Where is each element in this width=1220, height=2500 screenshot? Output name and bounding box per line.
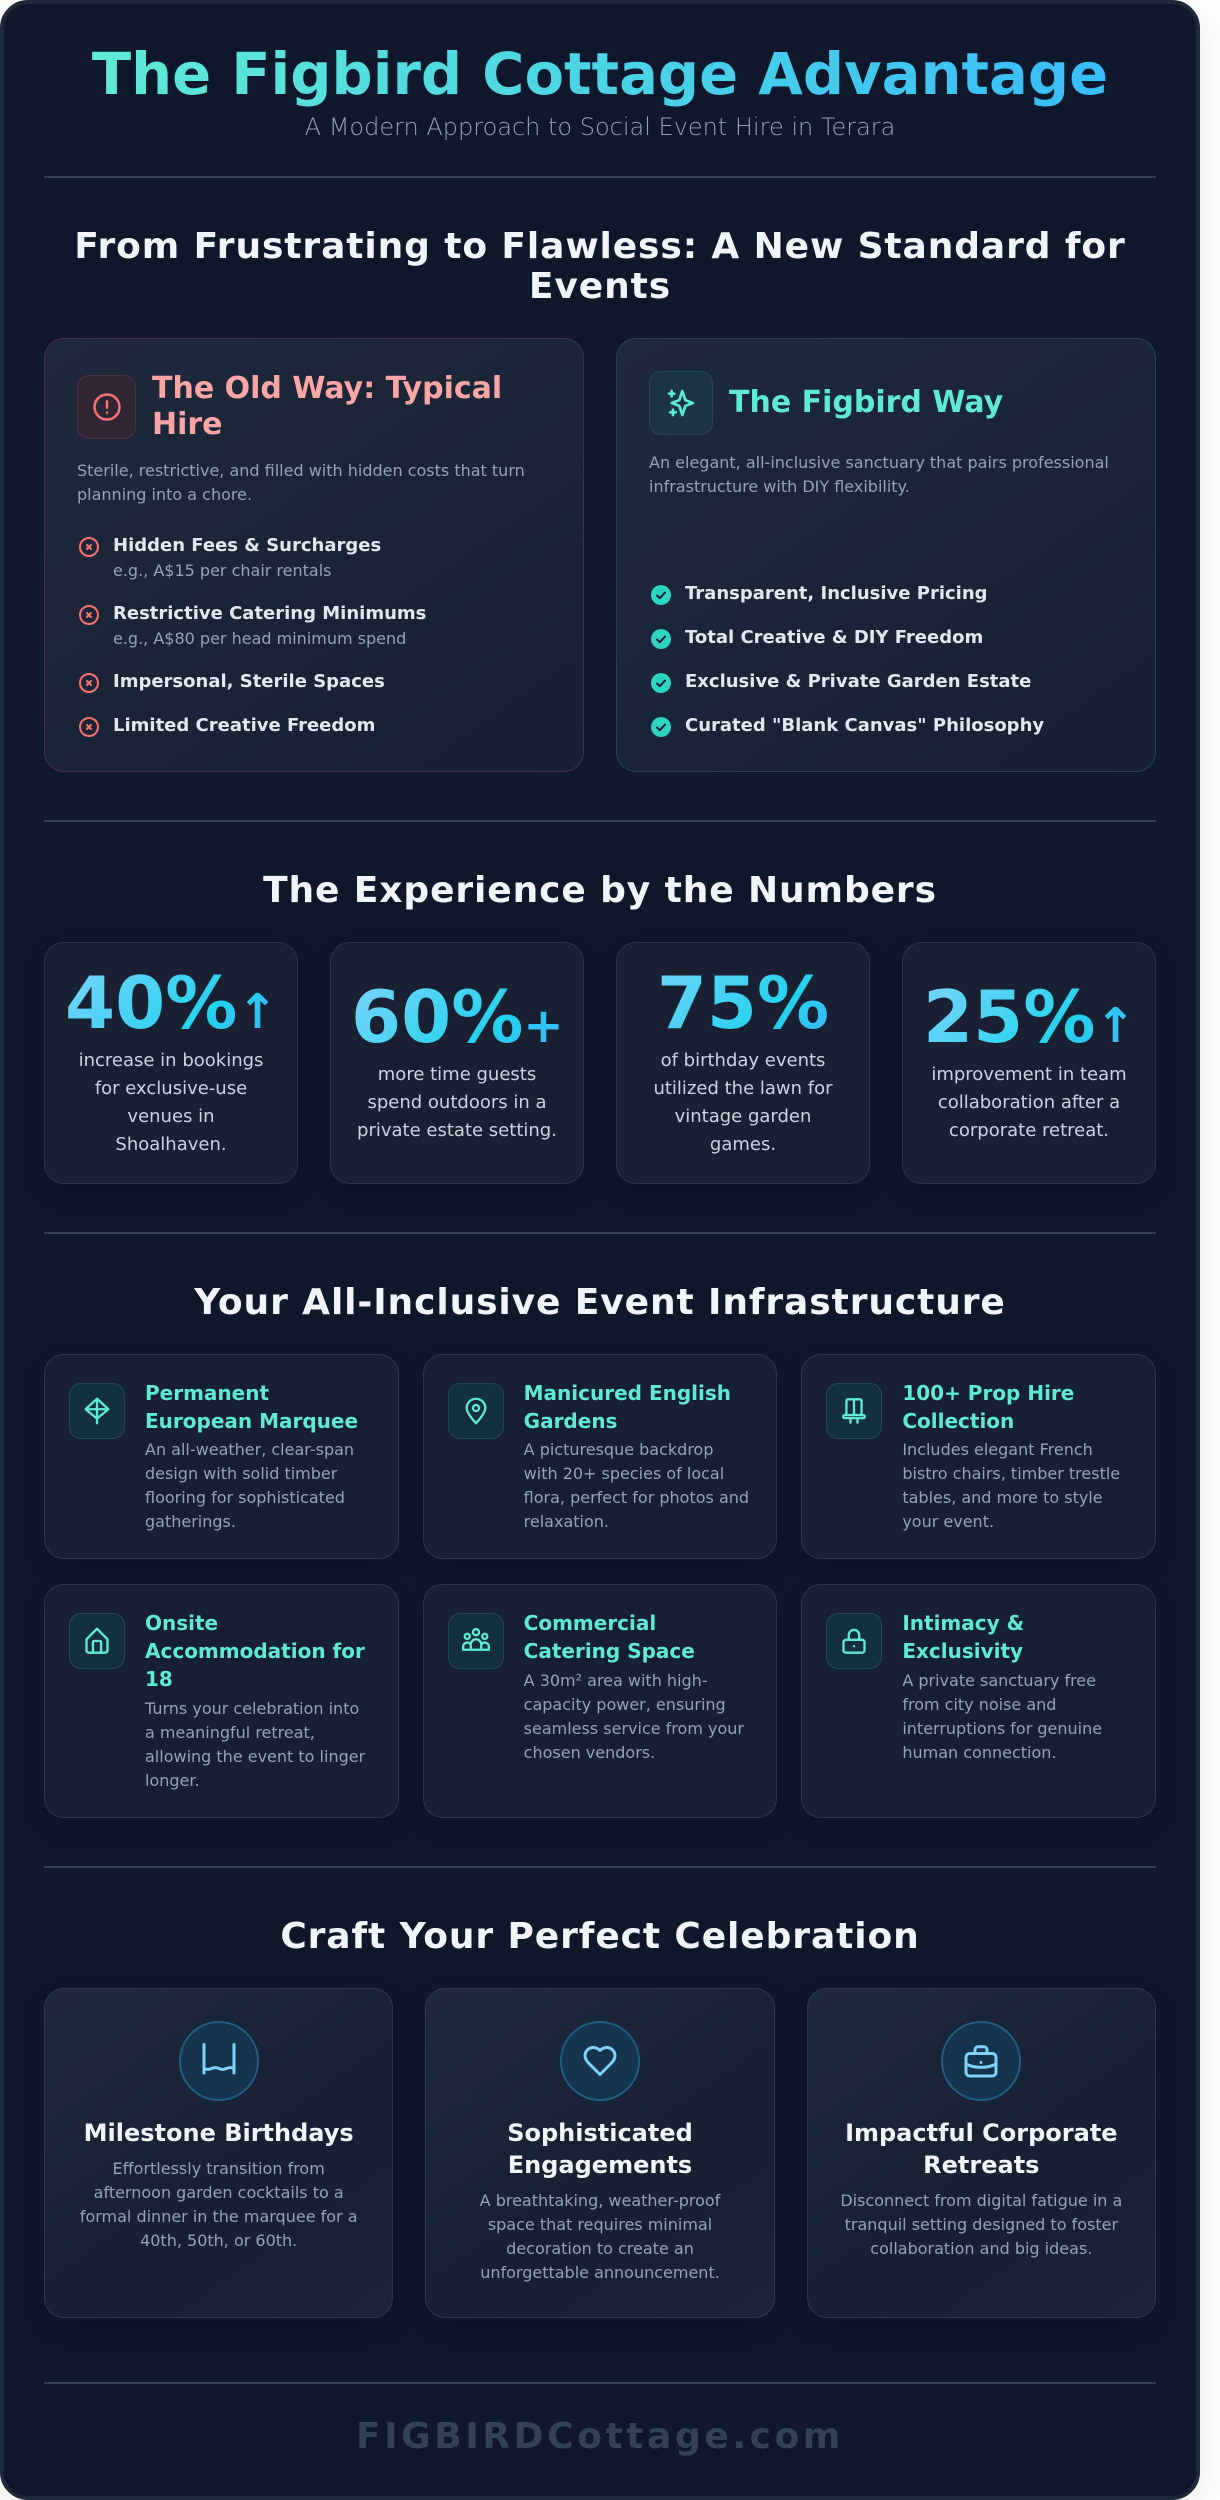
footer website: FIGBIRDCottage.com [356,2416,844,2457]
stat value: 40%↑ [65,961,278,1045]
use case text: collaboration and big ideas. [870,2239,1092,2258]
stat card: 40% [44,942,298,1184]
stat caption: Shoalhaven. [115,1134,227,1155]
stat value: 25%↑ [923,975,1136,1059]
use case title: Milestone Birthdays [84,2119,354,2147]
feature title: Accommodation for [145,1639,365,1663]
item: catering minimums [79,603,426,648]
stat card: 25% [902,942,1156,1184]
feature text: from city noise and [902,1695,1056,1714]
stat caption: private estate setting. [357,1120,557,1141]
use case text: afternoon garden cocktails to a [94,2183,344,2202]
panel: the figbird way [616,338,1156,772]
icon: check circle [651,717,671,737]
item: private estate [651,671,1031,693]
item title: Impersonal, Sterile Spaces [113,671,385,692]
feature: accommodation [44,1584,399,1818]
icon: cake [179,2021,259,2101]
stat caption: for exclusive-use [95,1078,247,1099]
old way description [77,461,525,504]
use case title: Retreats [923,2151,1039,2179]
item: hidden fees [79,535,381,580]
stat card: 75% [616,942,870,1184]
feature text: allowing the event to linger [145,1747,365,1766]
feature text: with 20+ species of local [524,1464,724,1483]
stat value: 75% [657,961,829,1045]
stat card: 60% [330,942,584,1184]
feature title: 100+ Prop Hire [902,1381,1074,1405]
feature text [902,1440,1120,1531]
feature title: Collection [902,1409,1014,1433]
feature text: An all-weather, clear-span [145,1440,354,1459]
feature: prop hire [801,1354,1156,1559]
feature text: A 30m² area with high- [524,1671,708,1690]
feature title: 18 [145,1667,173,1691]
stat caption: vintage garden [675,1106,811,1127]
stat caption [79,1050,263,1155]
heading: comparison section: From Frustrating to Flawless: A New Standard for [74,226,1126,267]
stat caption: collaboration after a [938,1092,1120,1113]
use case title [808,2117,1155,2181]
item detail: e.g., A$15 per chair rentals [113,561,332,580]
use case title: Impactful Corporate [845,2119,1118,2147]
use case text: Effortlessly transition from [113,2159,325,2178]
panel: the old way [44,338,584,772]
feature text: capacity power, ensuring [524,1695,726,1714]
item title: Restrictive Catering Minimums [113,603,426,624]
feature title: European Marquee [145,1409,358,1433]
old way description: planning into a chore. [77,485,252,504]
old way heading: Hire [152,407,223,442]
use case text: space that requires minimal [488,2215,712,2234]
icon: map pin [448,1383,504,1439]
icon: marquee [69,1383,125,1439]
use case text: formal dinner in the marquee for a [80,2207,358,2226]
icon: sparkles [649,371,713,435]
feature text: tables, and more to style [902,1488,1103,1507]
stat caption: more time guests [378,1064,536,1085]
stat caption: of birthday events [661,1050,825,1071]
old way description: Sterile, restrictive, and filled with hidden costs that turn [77,461,525,480]
feature text: longer. [145,1771,200,1790]
feature title: Intimacy & [902,1611,1024,1635]
title: The Figbird Cottage Advantage [92,41,1108,108]
feature title: Onsite [145,1611,218,1635]
heading: comparison section: Events [529,266,671,307]
feature text [145,1440,354,1531]
old way heading [152,371,502,442]
feature text: Includes elegant French [902,1440,1093,1459]
stat value: 60%+ [351,975,564,1059]
feature text [524,1440,749,1531]
feature: intimacy [801,1584,1156,1818]
feature title: Exclusivity [902,1639,1023,1663]
stat caption: increase in bookings [79,1050,263,1071]
item: impersonal spaces [79,671,385,693]
icon: x circle [79,537,99,557]
heading: celebration section: Craft Your Perfect Celebration [280,1916,920,1957]
use case: corporate [807,1988,1156,2318]
item: blank canvas [651,715,1044,737]
item: transparent pricing [651,583,988,605]
item title: Exclusive & Private Garden Estate [685,671,1031,692]
icon: check circle [651,673,671,693]
icon: alert circle [77,375,136,439]
feature title [145,1381,358,1433]
use case text: 40th, 50th, or 60th. [140,2231,297,2250]
feature text: design with solid timber [145,1464,337,1483]
use case title: Engagements [508,2151,692,2179]
stat caption [931,1064,1127,1141]
feature text: your event. [902,1512,994,1531]
feature title [524,1381,731,1433]
icon: check circle [651,629,671,649]
feature title [902,1381,1074,1433]
icon: users [448,1613,504,1669]
old way heading: The Old Way: Typical [152,371,502,406]
use case title: Sophisticated [507,2119,693,2147]
icon: x circle [79,605,99,625]
feature: marquee [44,1354,399,1559]
use case text: A breathtaking, weather-proof [480,2191,720,2210]
figbird way description: An elegant, all-inclusive sanctuary that pairs professional [649,453,1109,472]
feature text: flooring for sophisticated [145,1488,345,1507]
subtitle: A Modern Approach to Social Event Hire in Terara [305,113,895,141]
use case text [808,2189,1155,2261]
heading: numbers section: The Experience by the Numbers [263,870,937,911]
feature text: seamless service from your [524,1719,744,1738]
feature text: A picturesque backdrop [524,1440,713,1459]
icon: x circle [79,673,99,693]
heading: comparison section [74,226,1126,307]
stat caption: improvement in team [931,1064,1127,1085]
feature text: Turns your celebration into [145,1699,359,1718]
stat caption: utilized the lawn for [653,1078,833,1099]
icon: heart [560,2021,640,2101]
use case text: decoration to create an [506,2239,694,2258]
feature text: gatherings. [145,1512,236,1531]
stat caption: spend outdoors in a [367,1092,547,1113]
use case title [426,2117,774,2181]
icon: briefcase [941,2021,1021,2101]
figbird way heading: The Figbird Way [729,385,1003,420]
icon: check circle [651,585,671,605]
icon: x circle [79,717,99,737]
heading: infrastructure section: Your All-Inclusive Event Infrastructure [194,1282,1006,1323]
feature title [145,1611,365,1691]
stat caption: games. [710,1134,776,1155]
stat caption: corporate retreat. [949,1120,1109,1141]
stat caption: venues in [127,1106,215,1127]
icon: house [69,1613,125,1669]
feature title: Commercial [524,1611,656,1635]
use case: engagements [425,1988,775,2318]
feature title: Gardens [524,1409,617,1433]
item: creative freedom [651,627,983,649]
feature text: flora, perfect for photos and [524,1488,749,1507]
feature text: a meaningful retreat, [145,1723,315,1742]
feature text: chosen vendors. [524,1743,655,1762]
feature title: Manicured English [524,1381,731,1405]
feature text: bistro chairs, timber trestle [902,1464,1120,1483]
feature: gardens [423,1354,777,1559]
use case text: tranquil setting designed to foster [845,2215,1118,2234]
figbird way description: infrastructure with DIY flexibility. [649,477,910,496]
feature text: relaxation. [524,1512,609,1531]
item title: Hidden Fees & Surcharges [113,535,381,556]
item title: Limited Creative Freedom [113,715,375,736]
feature text [524,1671,744,1762]
feature text [902,1669,1102,1765]
feature title: Catering Space [524,1639,695,1663]
stat caption [357,1064,557,1141]
item title: Curated "Blank Canvas" Philosophy [685,715,1044,736]
item: limited freedom [79,715,375,737]
use case text [426,2189,774,2285]
icon: lock [826,1613,882,1669]
item detail: e.g., A$80 per head minimum spend [113,629,406,648]
feature title [902,1611,1024,1663]
stat caption [653,1050,833,1155]
feature text: interruptions for genuine [902,1719,1102,1738]
use case text [45,2157,392,2253]
icon: chair [826,1383,882,1439]
feature text: A private sanctuary free [902,1671,1096,1690]
feature: catering [423,1584,777,1818]
item title: Total Creative & DIY Freedom [685,627,983,648]
feature title: Permanent [145,1381,269,1405]
feature text [144,1699,366,1790]
figbird way description [649,453,1109,496]
feature title [524,1611,695,1663]
item title: Transparent, Inclusive Pricing [685,583,988,604]
use case text: unforgettable announcement. [480,2263,720,2282]
use case text: Disconnect from digital fatigue in a [840,2191,1122,2210]
use case: birthdays [44,1988,393,2318]
feature text: human connection. [902,1743,1056,1762]
